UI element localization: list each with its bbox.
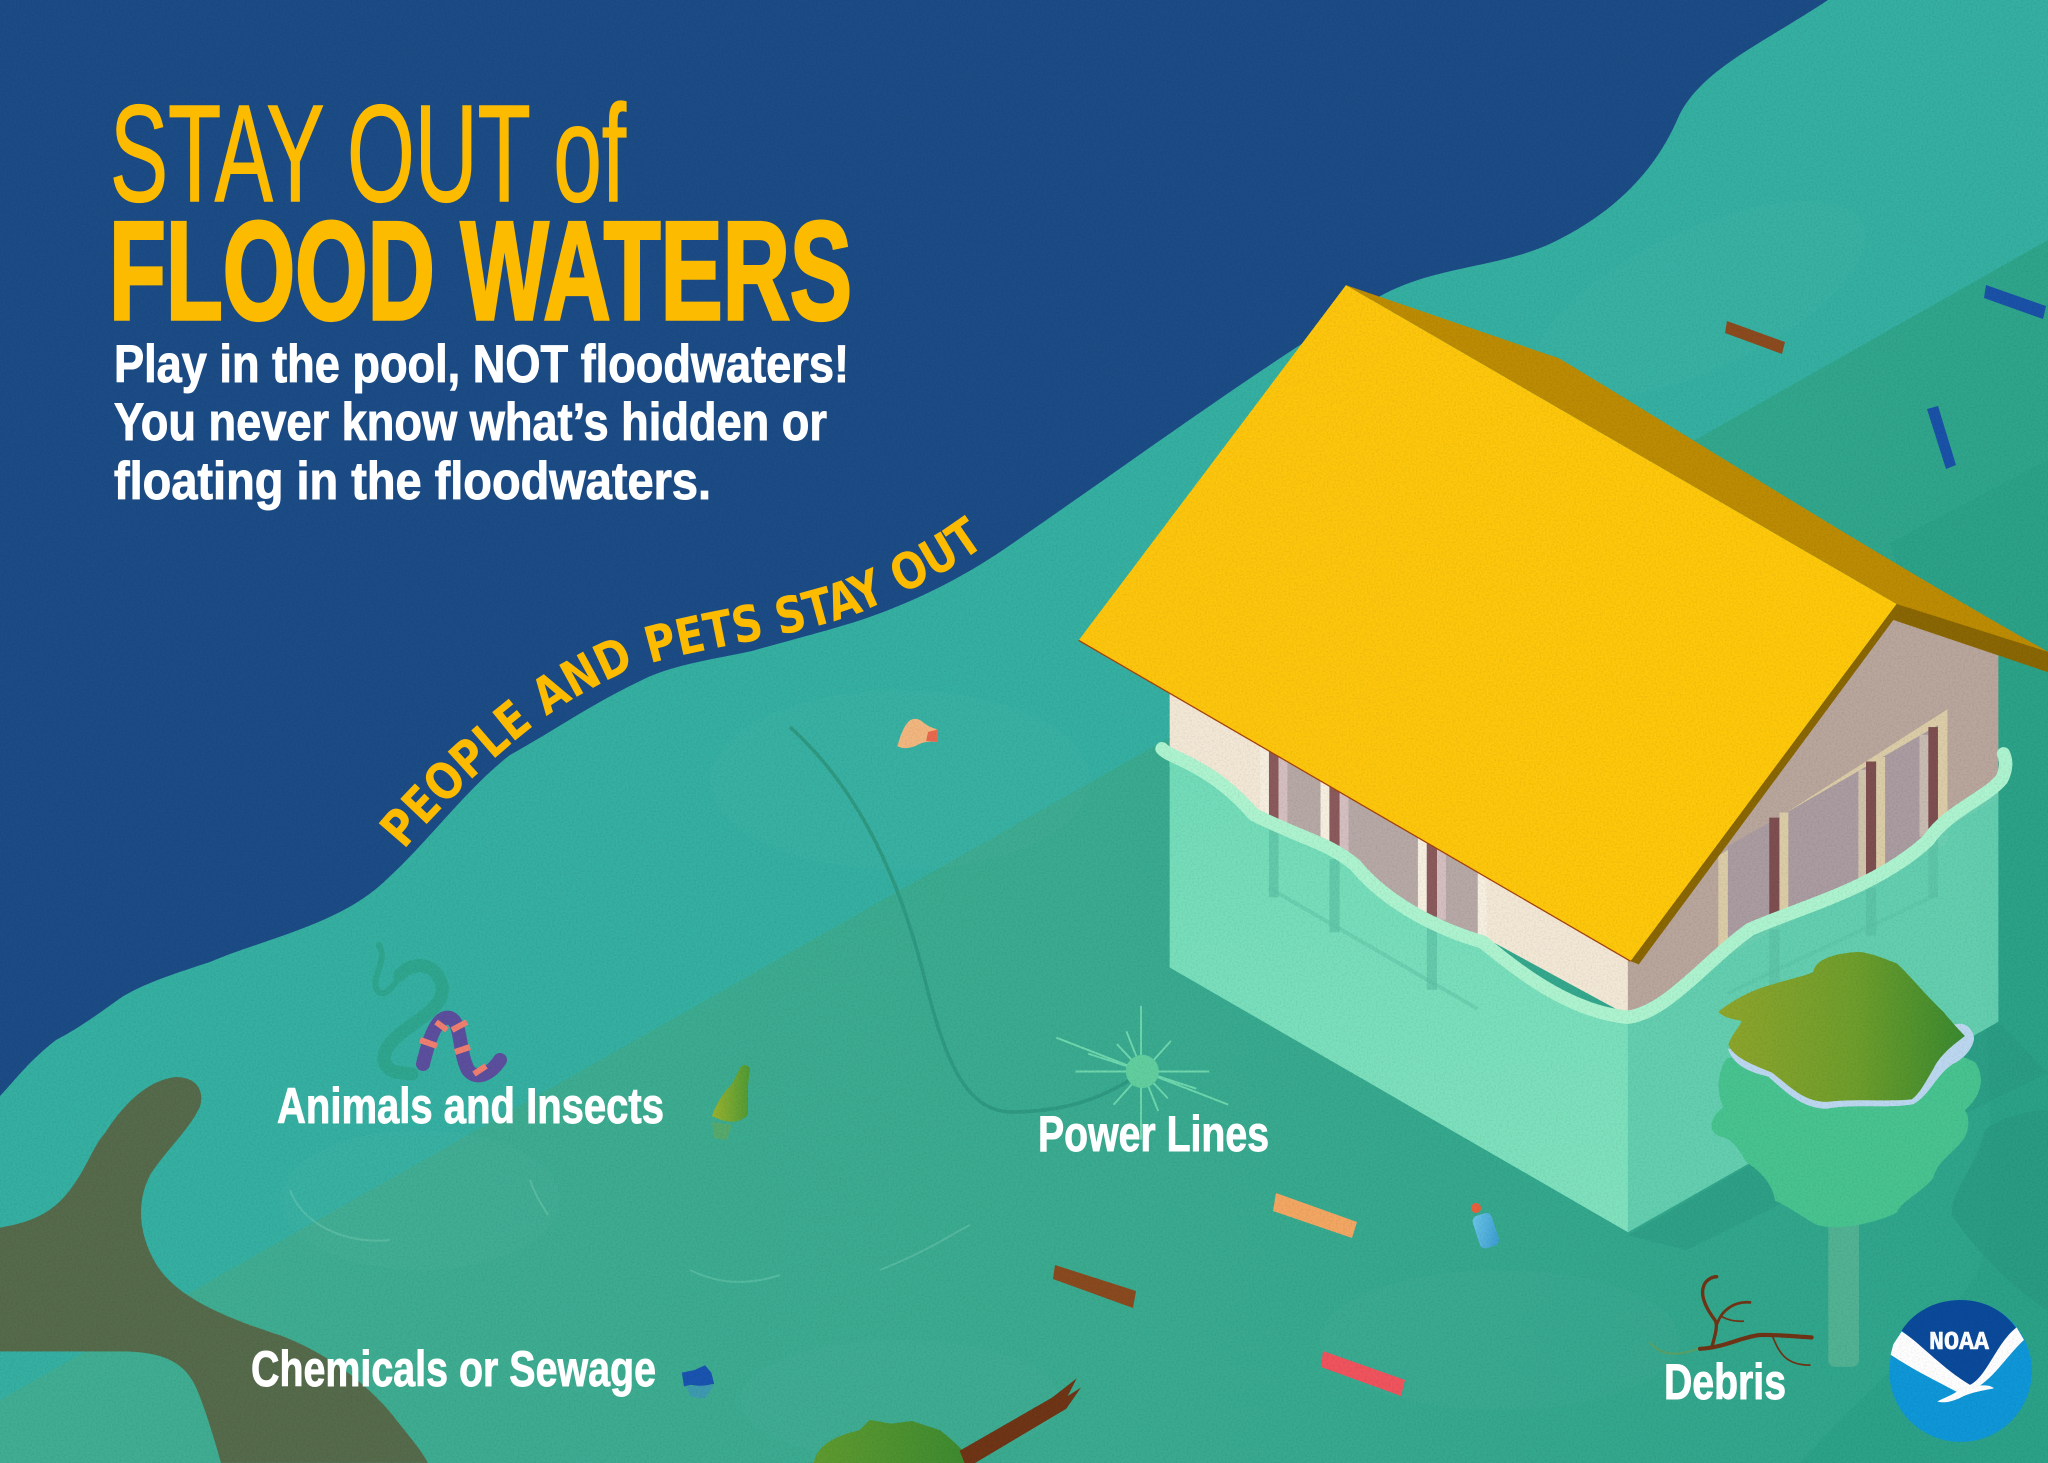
icon: bare branch debris: [1650, 1277, 1812, 1365]
logo light blue disc: [1889, 1300, 2032, 1442]
house shadow on water: [1628, 1022, 2048, 1250]
label: Power Lines: Power Lines: [1038, 1106, 1269, 1162]
icon: blue chemical blob: [682, 1365, 714, 1399]
roof ridge dark slope: [1346, 285, 2048, 671]
icon: plastic bottle: [1471, 1203, 1501, 1250]
waterline ring: [1162, 749, 2006, 1017]
logo dark blue top: [1902, 1300, 2017, 1385]
submerged window outlines: [1269, 824, 1938, 990]
intro text: floating in the floodwaters.: [114, 452, 711, 511]
floating plank: red: [1321, 1351, 1405, 1396]
intro text: [114, 335, 849, 511]
label: Debris: Debris: [1664, 1354, 1786, 1410]
submerged canopy: [1712, 1045, 1981, 1227]
submerged trunk: [1828, 1218, 1859, 1367]
logo: NOAA: [1889, 1300, 2032, 1442]
branch shape: brown-green fallen tree limb: [0, 1077, 428, 1463]
submerged window sills: [1269, 888, 1938, 1009]
icon: submerged snake: [375, 945, 500, 1075]
house: [1079, 285, 2048, 1250]
floating plank: blue vertical: [1927, 406, 1956, 469]
roof main face: [1079, 285, 1897, 961]
icon: broken wooden branch: [960, 1378, 1081, 1463]
gable side wall: [1628, 614, 1998, 1015]
floating plank: brown upper: [1725, 321, 1785, 354]
snake purple body: [423, 1018, 500, 1075]
snake stripes: [420, 1022, 486, 1074]
background: darker water beside house: [1800, 460, 2048, 1463]
background: tree shadow on water: [1952, 1110, 2048, 1310]
label: Animals and Insects: Animals and Insects: [277, 1078, 664, 1134]
curved warning text: PEOPLE AND PETS STAY OUT: [378, 514, 978, 848]
floating plank: blue top right: [1984, 285, 2046, 319]
icon: green glass bottle: [712, 1065, 750, 1140]
logo white bird swoosh: [1891, 1327, 2024, 1402]
label: Chemicals or Sewage: Chemicals or Sewage: [251, 1341, 656, 1397]
tree canopy above water: [1718, 952, 1965, 1102]
background: faint ripples: [290, 1180, 970, 1282]
intro text: Play in the pool, NOT floodwaters!: [114, 335, 849, 394]
water volume: front face: [1170, 754, 1628, 1232]
intro text: You never know what’s hidden or: [114, 393, 827, 452]
icon: floating rock debris: [897, 719, 938, 748]
water volume: right face: [1628, 779, 1998, 1232]
roof eave underside: [1630, 604, 2048, 964]
waterline rim around tree: [1728, 1024, 1974, 1109]
front wall cream: [1170, 687, 1628, 1015]
snake underwater body: [384, 966, 442, 1074]
snake underwater tail: [375, 945, 400, 993]
title line 1: STAY OUT of: [110, 77, 626, 231]
front windows: [1260, 744, 1487, 948]
side windows: [1718, 709, 1947, 958]
tree in flood: [1712, 952, 1981, 1367]
icon: bottom tree top: [814, 1420, 972, 1463]
roof edge line: [1079, 640, 1630, 961]
title: [109, 77, 852, 349]
title line 2: FLOOD WATERS: [109, 192, 852, 349]
floating plank: brown lower: [1053, 1265, 1136, 1308]
spark at end of power line: [1056, 1006, 1228, 1140]
background: faint water patches: [280, 160, 1893, 1460]
power line wire: [790, 727, 1130, 1112]
floating plank: orange: [1273, 1193, 1357, 1238]
logo wordmark: NOAA: [1929, 1327, 1989, 1357]
